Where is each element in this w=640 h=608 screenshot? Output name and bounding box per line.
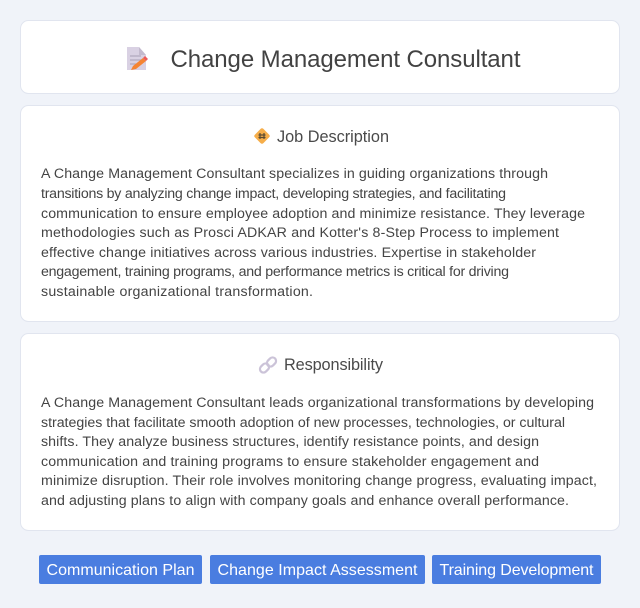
tag: Training Development <box>432 555 601 584</box>
panel: responsibility <box>20 334 620 530</box>
panel: title card <box>20 20 620 94</box>
heading: job description: Job Description <box>277 128 389 146</box>
text block: responsibility: and adjusting plans to align with company goals and enhance overall performance. <box>41 493 569 509</box>
text block: job description: engagement, training programs, and performance metrics is critical for driving <box>41 264 509 280</box>
text block: job description: sustainable organizational transformation. <box>41 284 313 300</box>
text block: responsibility: shifts. They analyze business structures, identify resistance points, and design <box>41 434 539 450</box>
text block: responsibility <box>41 395 597 509</box>
tag: Communication Plan: Communication Plan <box>46 562 194 579</box>
text block: job description: communication to ensure employee adoption and minimize resistance. They leverage <box>41 206 585 222</box>
text block: job description: methodologies such as Prosci ADKAR and Kotter's 8-Step Process to implement <box>41 225 559 241</box>
heading: responsibility: Responsibility <box>284 356 384 374</box>
text block: job description <box>41 166 585 300</box>
icon: document with pencil <box>127 47 148 70</box>
title: Change Management Consultant <box>170 46 521 73</box>
tag: Change Impact Assessment: Change Impact Assessment <box>218 562 418 579</box>
tag: Change Impact Assessment <box>210 555 425 584</box>
panel: job description <box>20 106 620 322</box>
text block: responsibility: minimize disruption. Their role involves monitoring change progress, evaluating impact, <box>41 473 597 489</box>
icon: link <box>258 356 278 374</box>
text block: job description: effective change initiatives across various industries. Expertise in stakeholder <box>41 245 536 261</box>
text block: responsibility: communication and training programs to ensure stakeholder engagement and <box>41 454 539 470</box>
tag: Communication Plan <box>39 555 202 584</box>
text block: responsibility: strategies that facilitate smooth adoption of new processes, technologies, or cultural <box>41 415 565 431</box>
text block: responsibility: A Change Management Consultant leads organizational transformations by developing <box>41 395 594 411</box>
tag: Training Development: Training Development <box>440 562 594 579</box>
icon: construction diamond <box>254 128 270 144</box>
text block: job description: A Change Management Consultant specializes in guiding organizations through <box>41 166 548 182</box>
text block: job description: transitions by analyzing change impact, developing strategies, and facilitating <box>41 186 506 202</box>
